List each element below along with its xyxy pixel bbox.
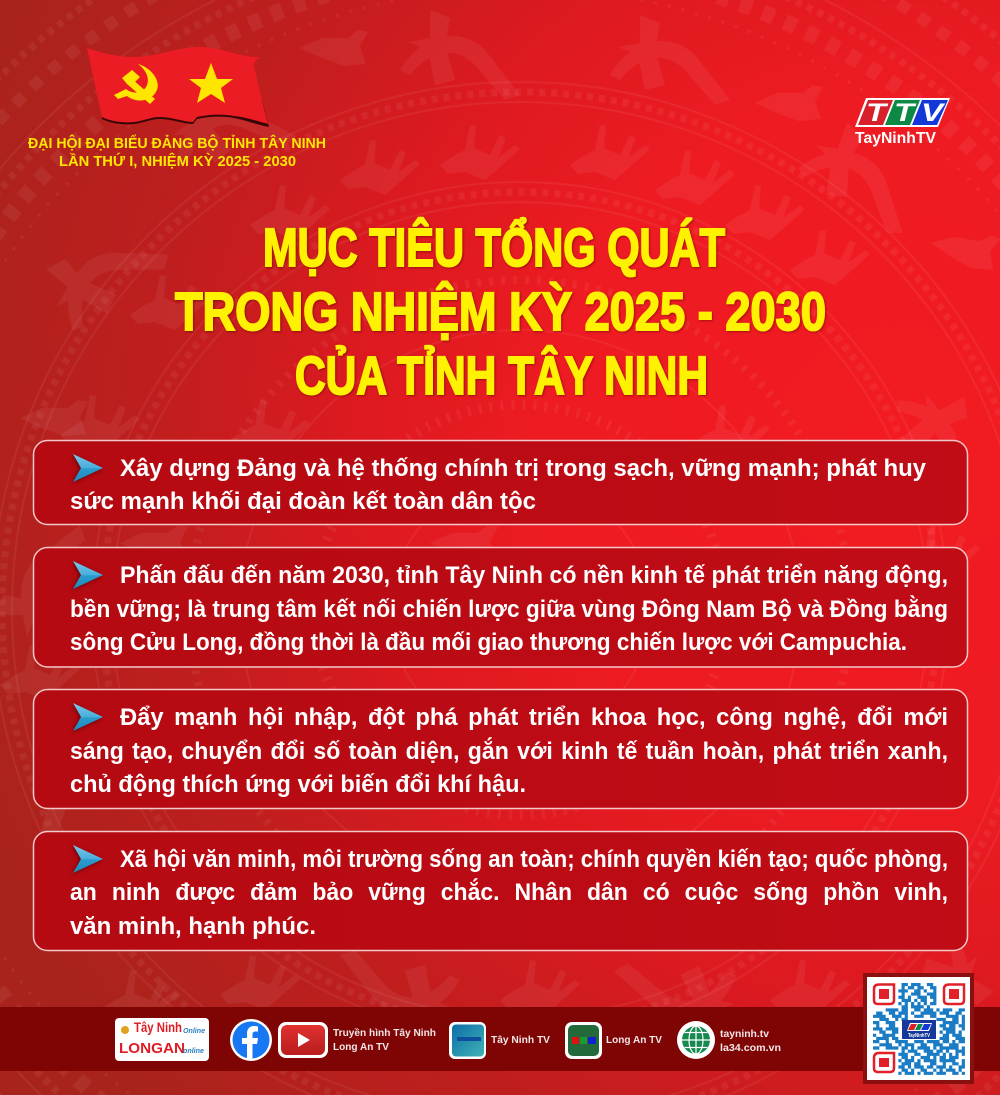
- qr finders: [874, 984, 964, 1072]
- panel text: sông Cửu Long, đồng thời là đầu mối giao thương chiến lược với Campuchia.: [70, 629, 907, 656]
- logo card: Tây Ninh Online, Long An Online: Online: [183, 1028, 205, 1035]
- congress heading: ĐẠI HỘI ĐẠI BIỂU ĐẢNG BỘ TỈNH TÂY NINH: [28, 134, 326, 152]
- icon: globe: [677, 1021, 715, 1059]
- title: [175, 217, 826, 406]
- congress heading: LẦN THỨ I, NHIỆM KỲ 2025 - 2030: [59, 152, 296, 170]
- panel: economy: [34, 548, 968, 667]
- channel label: Truyền hình Tây Ninh: Truyền hình Tây Ninh: [333, 1027, 436, 1039]
- icon: facebook: [230, 1019, 272, 1061]
- panel text: Phấn đấu đến năm 2030, tỉnh Tây Ninh có nền kinh tế phát triển năng động,: [120, 562, 948, 589]
- logo card: Tây Ninh Online, Long An Online: Tây Ninh: [134, 1019, 182, 1035]
- logo: TayNinhTV: [855, 98, 950, 147]
- panel text: sáng tạo, chuyển đổi số toàn diện, gắn với kinh tế tuần hoàn, phát triển xanh,: [70, 737, 948, 765]
- flag shadow: [102, 100, 269, 127]
- panel text: văn minh, hạnh phúc.: [70, 913, 316, 940]
- logo card: Tây Ninh Online, Long An Online: LONGAN: [119, 1040, 185, 1057]
- label: Long An TV: Long An TV: [606, 1034, 662, 1046]
- logo card: Tây Ninh Online, Long An Online: online: [183, 1048, 204, 1055]
- flag cloth: [87, 47, 268, 124]
- logo: TayNinhTV: T: [894, 99, 918, 127]
- panel: party building: [34, 440, 968, 524]
- panel text: [70, 704, 948, 798]
- logo: TayNinhTV: TayNinhTV: [855, 130, 936, 147]
- emblem: party flag: [87, 47, 269, 127]
- icon: youtube: [278, 1022, 328, 1058]
- arrow icon: [73, 845, 103, 873]
- title: CỦA TỈNH TÂY NINH: [295, 345, 708, 406]
- footer band: [0, 1007, 1000, 1071]
- panel text: sức mạnh khối đại đoàn kết toàn dân tộc: [70, 488, 536, 515]
- title: MỤC TIÊU TỔNG QUÁT: [263, 217, 725, 278]
- arrow icon: [73, 454, 103, 482]
- arrow icon: [73, 703, 103, 731]
- panel text: [70, 846, 948, 940]
- website labels: [720, 1028, 781, 1054]
- panel text: [70, 455, 927, 515]
- panel text: bền vững; là trung tâm kết nối chiến lược giữa vùng Đông Nam Bộ và Đồng bằng: [70, 595, 948, 623]
- icon: Long An TV app: [565, 1022, 602, 1059]
- icon: Tây Ninh TV app: [449, 1022, 486, 1059]
- channel label: Truyền hình Tây Ninh: Long An TV: [333, 1041, 389, 1053]
- panel: integration: [34, 690, 968, 808]
- website labels: tayninh.tv: [720, 1028, 769, 1040]
- logo: TayNinhTV: T: [866, 99, 890, 127]
- title: TRONG NHIỆM KỲ 2025 - 2030: [175, 281, 826, 342]
- channel label: Truyền hình Tây Ninh: [333, 1027, 436, 1053]
- QR code: [863, 973, 974, 1084]
- congress heading: [28, 134, 326, 170]
- star: [189, 63, 233, 103]
- website labels: la34.com.vn: [720, 1042, 781, 1054]
- qr modules: [873, 985, 965, 1073]
- panel text: Xây dựng Đảng và hệ thống chính trị trong sạch, vững mạnh; phát huy: [120, 455, 927, 482]
- panel: society: [34, 832, 968, 950]
- panel text: Đẩy mạnh hội nhập, đột phá phát triển khoa học, công nghệ, đổi mới: [120, 704, 948, 731]
- panel text: Xã hội văn minh, môi trường sống an toàn; chính quyền kiến tạo; quốc phòng,: [120, 846, 948, 873]
- hammer and sickle: [114, 64, 158, 104]
- logo: TayNinhTV: V: [921, 99, 946, 127]
- arrow icon: [73, 561, 103, 589]
- panel text: chủ động thích ứng với biến đổi khí hậu.: [70, 771, 526, 798]
- panel text: an ninh được đảm bảo vững chắc. Nhân dân có cuộc sống phồn vinh,: [70, 878, 948, 906]
- panel text: [70, 562, 948, 656]
- label: Tây Ninh TV: Tây Ninh TV: [491, 1034, 550, 1046]
- qr centre logo: TayNinhTV: [908, 1033, 931, 1039]
- logo card: Tây Ninh Online, Long An Online: [115, 1018, 209, 1061]
